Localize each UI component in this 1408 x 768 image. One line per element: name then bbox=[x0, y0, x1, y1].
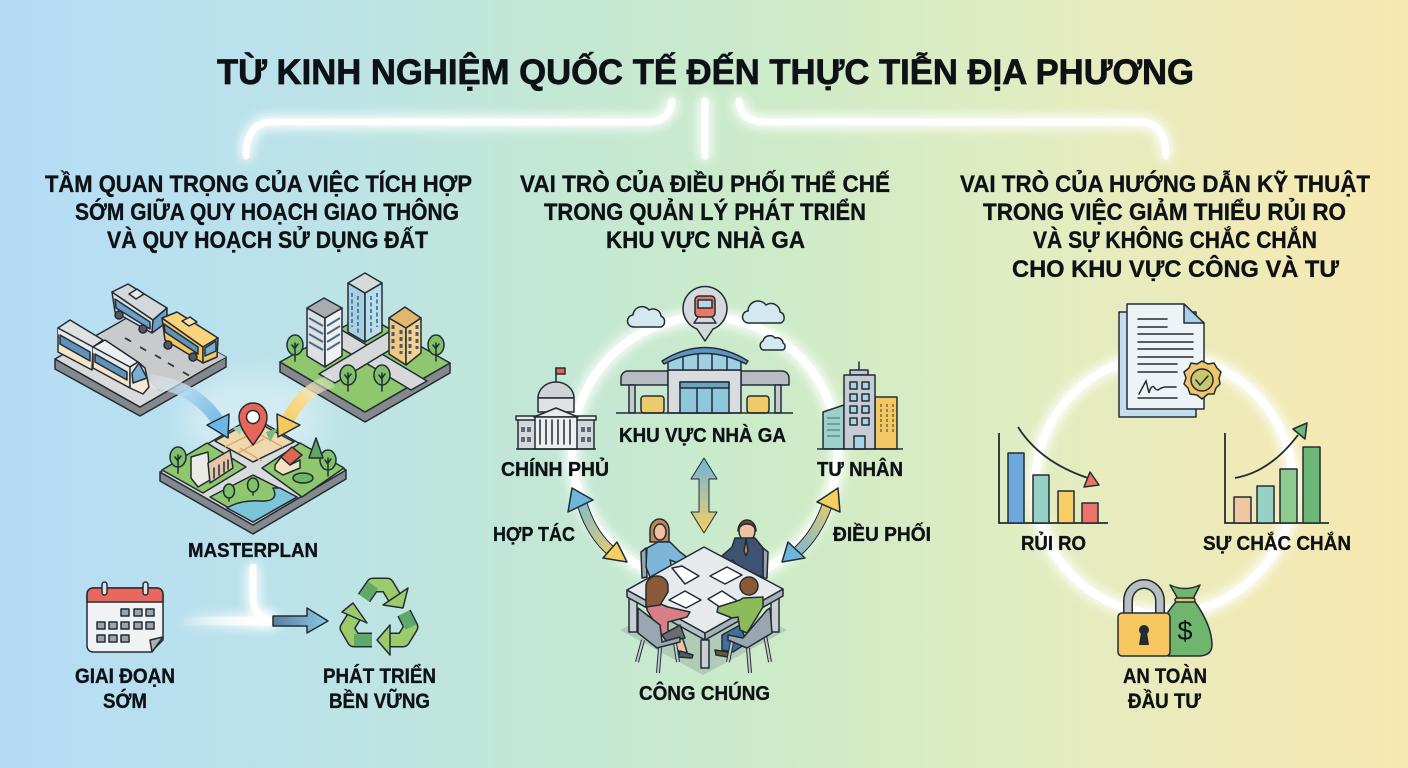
arrow: government to public bbox=[568, 488, 627, 562]
icon: clouds bbox=[627, 301, 785, 350]
icon: map pin bbox=[239, 403, 267, 445]
heading: column 3 bbox=[960, 169, 1370, 283]
chart: rising certainty bars bbox=[1225, 423, 1329, 523]
label: sustainable development: PHÁT TRIỂN bbox=[323, 665, 436, 688]
heading: column 2: VAI TRÒ CỦA ĐIỀU PHỐI THỂ CHẾ bbox=[520, 169, 890, 198]
heading: column 3: TRONG VIỆC GIẢM THIỂU RỦI RO bbox=[983, 197, 1346, 226]
connector: masterplan to sustainable development bbox=[180, 567, 276, 621]
panel: integration of planning bbox=[55, 273, 450, 713]
panel: institutional coordination bbox=[493, 287, 931, 705]
label: investment safety bbox=[1123, 665, 1207, 713]
arrow: land use to masterplan bbox=[277, 381, 333, 437]
arrow: transit to masterplan bbox=[150, 381, 229, 438]
label: cooperation: HỢP TÁC bbox=[493, 523, 575, 546]
icon: grey tower bbox=[307, 298, 342, 367]
figure: man in suit bbox=[715, 520, 768, 578]
arrow: private sector to public bbox=[782, 488, 840, 562]
arrow: to sustainable development bbox=[273, 608, 328, 633]
label: public: CÔNG CHÚNG bbox=[639, 681, 770, 705]
icon: money bag bbox=[1168, 585, 1212, 656]
label: station area: KHU VỰC NHÀ GA bbox=[619, 424, 786, 447]
label: certainty: SỰ CHẮC CHẮN bbox=[1203, 531, 1351, 555]
glowing ring bbox=[1035, 356, 1293, 614]
label: sustainable development: BỀN VỮNG bbox=[329, 689, 430, 713]
icon: grey bus bbox=[112, 284, 167, 333]
label: private sector: TƯ NHÂN bbox=[817, 457, 903, 481]
arrow: station to public bbox=[691, 458, 717, 533]
icon: signed document bbox=[1119, 304, 1221, 417]
figure: woman in blue bbox=[641, 519, 693, 578]
glowing ring bbox=[572, 317, 838, 583]
heading: column 1: TẦM QUAN TRỌNG CỦA VIỆC TÍCH HỢP bbox=[45, 169, 472, 198]
label: investment safety: ĐẦU TƯ bbox=[1128, 690, 1202, 713]
heading: column 3: CHO KHU VỰC CÔNG VÀ TƯ bbox=[1012, 255, 1339, 283]
icon: approval seal bbox=[1184, 361, 1221, 399]
icon: private sector building bbox=[817, 362, 903, 449]
heading: column 2: KHU VỰC NHÀ GA bbox=[606, 226, 805, 254]
icon: tan tower bbox=[389, 307, 421, 365]
icon: train pin bbox=[683, 287, 727, 341]
heading: column 2: TRONG QUẢN LÝ PHÁT TRIỂN bbox=[544, 197, 866, 226]
icon: station bbox=[616, 348, 793, 413]
trees bbox=[287, 335, 303, 361]
illustration: masterplan platform bbox=[160, 417, 346, 534]
icon: padlock bbox=[1118, 584, 1170, 656]
icon: money bag: $ bbox=[1177, 616, 1193, 646]
connector: title to three columns bbox=[246, 101, 1166, 156]
icon: calendar bbox=[87, 582, 163, 652]
heading: column 2 bbox=[520, 169, 890, 254]
label: investment safety: AN TOÀN bbox=[1123, 665, 1207, 688]
figure: woman in pink bbox=[637, 576, 693, 673]
label: risk: RỦI RO bbox=[1021, 531, 1086, 555]
heading: column 1: SỚM GIỮA QUY HOẠCH GIAO THÔNG bbox=[75, 198, 459, 226]
icon: yellow bus bbox=[162, 312, 218, 363]
icon: recycle bbox=[342, 585, 411, 655]
illustration: public meeting table bbox=[620, 519, 787, 675]
label: sustainable development bbox=[323, 665, 436, 713]
panel: technical guidance bbox=[999, 304, 1351, 713]
illustration: transit platform bbox=[55, 284, 226, 416]
icon: tram bbox=[58, 320, 149, 394]
icon: blue tower bbox=[348, 273, 382, 342]
figure: man in green bbox=[715, 577, 772, 673]
label: early stage bbox=[75, 665, 175, 713]
chart: falling risk bars bbox=[999, 427, 1108, 523]
label: early stage: SỚM bbox=[103, 689, 147, 713]
label: government: CHÍNH PHỦ bbox=[501, 457, 609, 481]
heading: column 1: VÀ QUY HOẠCH SỬ DỤNG ĐẤT bbox=[107, 225, 428, 254]
illustration: city platform bbox=[280, 273, 450, 422]
heading: column 1 bbox=[45, 169, 472, 254]
label: masterplan: MASTERPLAN bbox=[188, 540, 318, 562]
heading: column 3: VÀ SỰ KHÔNG CHẮC CHẮN bbox=[1033, 226, 1317, 254]
heading: column 3: VAI TRÒ CỦA HƯỚNG DẪN KỸ THUẬT bbox=[960, 169, 1370, 198]
table top bbox=[627, 547, 783, 668]
label: early stage: GIAI ĐOẠN bbox=[75, 665, 175, 688]
icon: government building bbox=[516, 368, 596, 449]
title: TỪ KINH NGHIỆM QUỐC TẾ ĐẾN THỰC TIỄN ĐỊA PHƯƠNG bbox=[217, 52, 1194, 92]
label: coordination: ĐIỀU PHỐI bbox=[833, 522, 931, 546]
